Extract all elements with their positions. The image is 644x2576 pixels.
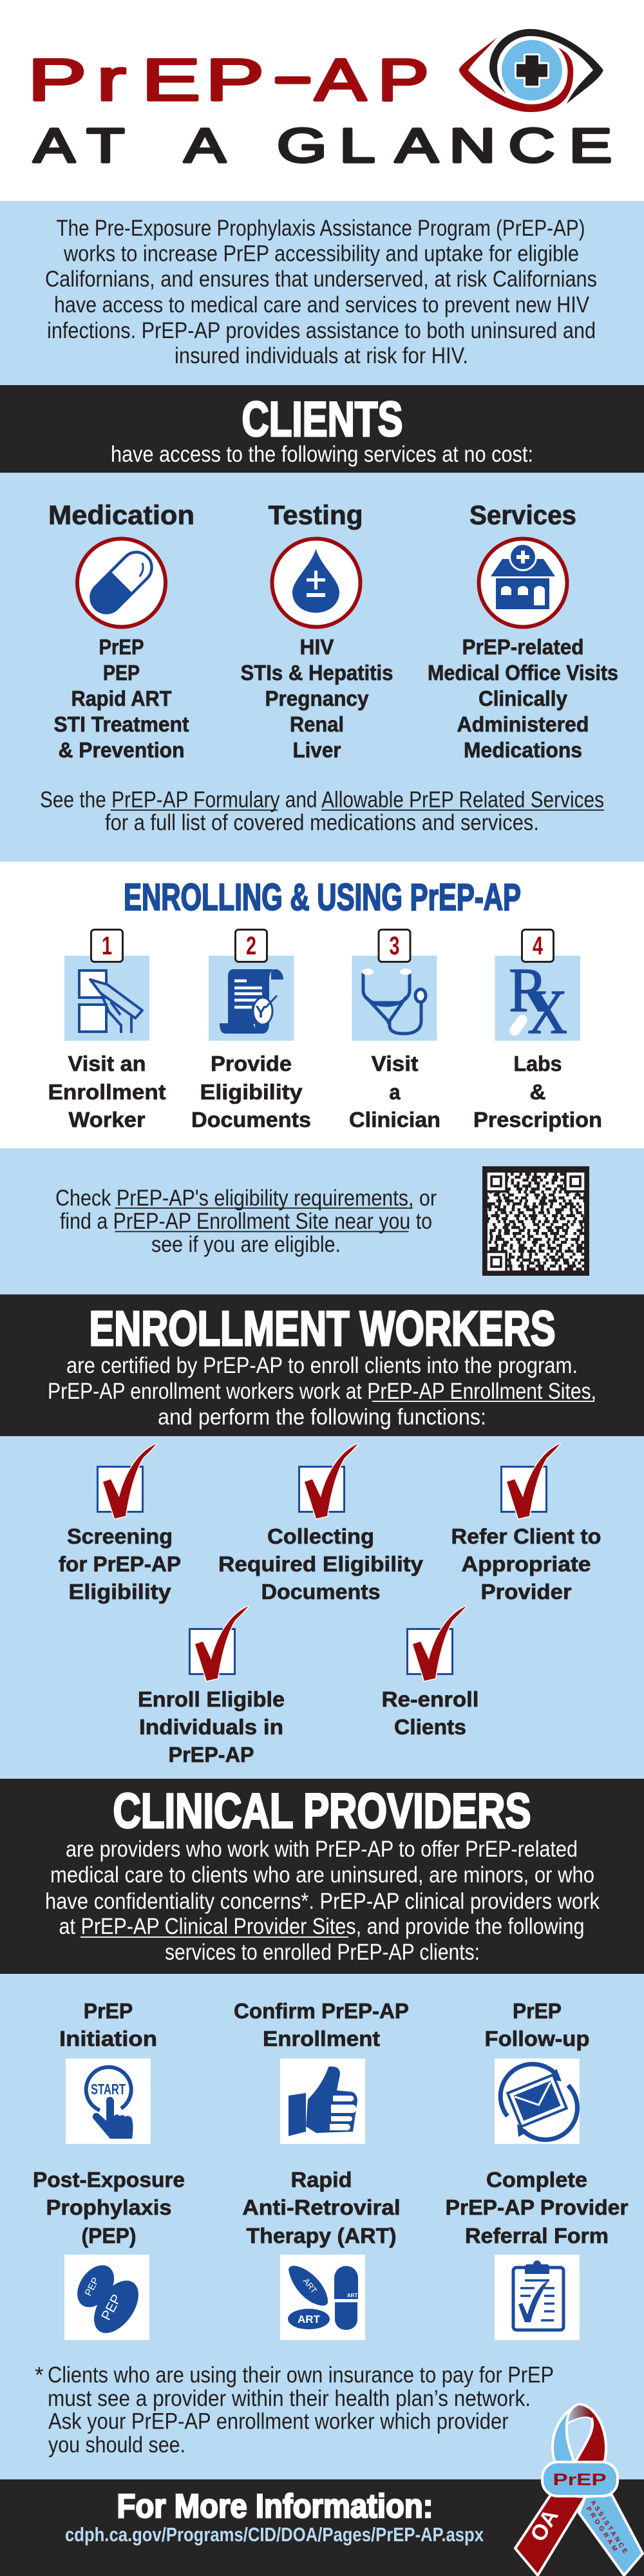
icon: checkbox (98, 1444, 156, 1519)
banner: enrollment workers (0, 1294, 644, 1436)
list: services (428, 635, 618, 762)
panel: introduction: insured individuals at risk for HIV. (175, 343, 468, 368)
function: refer client (451, 1444, 601, 1604)
footnote: you should see. (48, 2432, 185, 2458)
icon: blood drop (272, 538, 361, 627)
number badge 3: 3 (389, 932, 399, 960)
column: medication: Medication (48, 500, 194, 530)
service: PrEP initiation (59, 1999, 157, 2144)
text: eligibility links (55, 1186, 437, 1257)
step 3: clinician: Visit (371, 1052, 419, 1075)
function: enroll individuals (138, 1606, 285, 1766)
footer: more information (0, 2479, 644, 2576)
icon: awareness ribbon logo: PrEP (553, 2470, 607, 2489)
icon: eye logo (459, 29, 603, 112)
icon: Rx (507, 956, 567, 1046)
icon: clipboard (513, 2260, 564, 2330)
footnote: Ask your PrEP-AP enrollment worker which provider (48, 2409, 509, 2434)
number badge 3 (379, 930, 410, 962)
number badge 4 (522, 930, 554, 962)
service: confirm enrollment: Enrollment (263, 2027, 380, 2050)
service: rapid ART: Anti-Retroviral (242, 2195, 401, 2219)
icon: Rx: R (509, 956, 548, 1025)
service: PrEP follow-up (484, 1999, 590, 2144)
icon: awareness ribbon logo: PROGRAM (584, 2506, 618, 2553)
service: PrEP initiation: PrEP (84, 1999, 133, 2023)
list: medication: STI Treatment (54, 712, 189, 736)
text: eligibility links: see if you are eligible. (151, 1232, 341, 1257)
function: screening (59, 1444, 181, 1604)
banner body text: and perform the following functions: (158, 1405, 486, 1430)
list: testing: STIs & Hepatitis (241, 661, 393, 685)
text: eligibility links: find a PrEP-AP Enrollment Site near you to (60, 1209, 432, 1234)
icon: clinic building (479, 538, 567, 627)
list: testing: HIV (300, 635, 334, 659)
panel: enrollment worker functions (0, 1436, 644, 1779)
service: rapid ART: Therapy (ART) (246, 2224, 397, 2248)
service: referral form: Referral Form (465, 2224, 609, 2248)
list: services: Medications (464, 738, 582, 762)
heading: for more information: For More Information: (117, 2488, 433, 2525)
function: refer client: Provider (480, 1580, 572, 1604)
banner: clinical providers (0, 1779, 644, 1974)
icon: thumbs up (289, 2067, 357, 2136)
function: refer client: Refer Client to (451, 1524, 601, 1548)
service: rapid ART: Rapid (291, 2168, 352, 2192)
step 1: enrollment worker: Worker (68, 1108, 146, 1132)
function: collecting documents: Documents (261, 1580, 380, 1604)
text: eligibility links: Check PrEP-AP's eligibility requirements, or (55, 1186, 437, 1211)
function: collecting documents: Required Eligibility (218, 1552, 424, 1576)
panel: enrolling and using PrEP-AP (0, 862, 644, 1148)
icon: stethoscope (362, 969, 426, 1034)
column: services (428, 500, 618, 762)
function: enroll individuals: Individuals in (139, 1715, 283, 1739)
step 1: enrollment worker (48, 930, 166, 1132)
banner body text (48, 1353, 596, 1430)
step 1: enrollment worker: Visit an (68, 1052, 146, 1075)
icon: ART pills: ART (298, 2313, 321, 2325)
footnote: Clients who are using their own insurance to pay for PrEP (48, 2362, 554, 2388)
number badge 1 (91, 930, 122, 962)
step 2: eligibility documents (191, 930, 311, 1132)
step 4: labs and prescription: Prescription (473, 1108, 602, 1132)
function: screening: Screening (67, 1524, 173, 1548)
icon: ART pills: ART (301, 2276, 319, 2295)
QR code (482, 1166, 589, 1276)
panel: introduction: works to increase PrEP accessibility and uptake for eligible (63, 241, 579, 267)
icon: document scroll: Y (255, 1002, 267, 1021)
link: website url: cdph.ca.gov/Programs/CID/DOA/Pages/PrEP-AP.aspx (65, 2523, 484, 2546)
header: title and eye logo (0, 0, 644, 201)
list: medication: & Prevention (58, 738, 184, 762)
number badge 1: 1 (102, 932, 112, 960)
service: PrEP follow-up: PrEP (513, 1999, 562, 2023)
banner body text: services to enrolled PrEP-AP clients: (165, 1940, 480, 1965)
function: refer client: Appropriate (461, 1552, 591, 1576)
service: rapid ART (242, 2168, 401, 2340)
service: PEP: (PEP) (81, 2224, 137, 2248)
panel: client services (0, 473, 644, 862)
list: services: PrEP-related (462, 635, 583, 659)
step 2: eligibility documents: Eligibility (200, 1080, 303, 1104)
list: medication (54, 635, 189, 762)
icon: envelope cycle (500, 2064, 577, 2139)
panel: clinical provider services (0, 1974, 644, 2479)
function: collecting documents (218, 1444, 424, 1604)
column: services: Services (469, 500, 576, 530)
note: formulary links: for a full list of covered medications and services. (105, 810, 539, 835)
function: screening: Eligibility (68, 1580, 171, 1604)
function: collecting documents: Collecting (267, 1524, 374, 1548)
step 4: labs and prescription: Labs (514, 1052, 562, 1075)
icon: PEP pills: PEP (82, 2276, 102, 2298)
service: referral form (446, 2168, 629, 2340)
panel: introduction (0, 201, 644, 385)
icon: PEP pills (70, 2259, 147, 2341)
list: services: Medical Office Visits (428, 661, 618, 685)
title: AT A GLANCE: AT (33, 119, 124, 173)
note: formulary links (40, 787, 604, 835)
icon: checkbox (189, 1606, 249, 1681)
list: testing: Renal (290, 712, 344, 736)
service: PrEP initiation: Initiation (59, 2027, 157, 2050)
banner: clients (0, 385, 644, 473)
number badge 2: 2 (246, 932, 256, 960)
list: medication: PEP (103, 661, 140, 685)
icon: Rx: X (527, 978, 567, 1046)
step 4: labs and prescription: & (529, 1080, 546, 1104)
title: AT A GLANCE (33, 118, 612, 173)
icon: start button: START (91, 2081, 126, 2098)
number badge 4: 4 (533, 932, 544, 960)
banner subtext: have access to the following services at no cost: (111, 442, 533, 467)
list: medication: PrEP (99, 635, 144, 659)
list: testing: Pregnancy (265, 687, 369, 710)
banner body text: at PrEP-AP Clinical Provider Sites, and provide the following (59, 1914, 585, 1939)
icon: PEP pills: PEP (99, 2292, 124, 2323)
step 2: eligibility documents: Provide (211, 1052, 292, 1075)
list: testing: Liver (292, 738, 341, 762)
list: services: Clinically (478, 687, 568, 710)
list: medication: Rapid ART (71, 687, 171, 710)
number badge 2 (236, 930, 267, 962)
service: PrEP follow-up: Follow-up (484, 2027, 590, 2050)
service: PEP: Prophylaxis (46, 2195, 171, 2219)
icon: awareness ribbon logo (515, 2404, 643, 2575)
icon: hand signing form (79, 971, 142, 1033)
title: PrEP-AP (28, 43, 429, 113)
list: services: Administered (457, 712, 589, 736)
service: referral form: PrEP-AP Provider (446, 2195, 629, 2219)
step 3: clinician (349, 930, 440, 1132)
step 3: clinician: a (389, 1080, 401, 1104)
icon: document scroll (220, 969, 283, 1034)
icon: checkbox (407, 1606, 466, 1681)
column: testing: Testing (268, 500, 363, 530)
function: enroll individuals: PrEP-AP (169, 1743, 254, 1766)
heading: clinical providers: CLINICAL PROVIDERS (113, 1784, 531, 1839)
banner body text: are providers who work with PrEP-AP to offer PrEP-related (66, 1837, 578, 1862)
function: enroll individuals: Enroll Eligible (138, 1687, 285, 1711)
title: PrEP-AP: PrEP (28, 46, 264, 113)
panel: eligibility check (0, 1148, 644, 1294)
heading: clients: CLIENTS (242, 392, 403, 447)
service: PEP (33, 2168, 185, 2341)
column: testing (241, 500, 393, 762)
column: medication (48, 500, 194, 762)
function: re-enroll: Re-enroll (381, 1687, 479, 1711)
title: AT A GLANCE: GLANCE (277, 118, 612, 172)
icon: checkbox (299, 1444, 358, 1519)
icon: ART pills: ART (347, 2293, 357, 2298)
service: confirm enrollment (234, 1999, 409, 2144)
title: PrEP-AP: AP (315, 46, 429, 113)
step 1: enrollment worker: Enrollment (48, 1080, 166, 1104)
icon: awareness ribbon logo: OA (526, 2505, 564, 2546)
service: confirm enrollment: Confirm PrEP-AP (234, 1999, 409, 2023)
title: PrEP-AP: - (272, 43, 313, 109)
step 4: labs and prescription (473, 930, 602, 1132)
function: re-enroll (381, 1606, 479, 1739)
icon: ART pills (288, 2266, 358, 2330)
service: referral form: Complete (486, 2168, 587, 2192)
icon: start button (86, 2067, 133, 2139)
icon: checkbox (501, 1444, 560, 1519)
step 3: clinician: Clinician (349, 1108, 440, 1132)
footnote: must see a provider within their health plan’s network. (48, 2386, 531, 2411)
function: screening: for PrEP-AP (59, 1552, 181, 1576)
footnote (35, 2362, 554, 2458)
icon: awareness ribbon logo: ASSISTANCE (589, 2499, 629, 2555)
banner body text (45, 1837, 600, 1965)
banner body text: are certified by PrEP-AP to enroll clients into the program. (66, 1353, 578, 1378)
footnote: * (35, 2363, 44, 2388)
function: re-enroll: Clients (394, 1715, 466, 1739)
title: AT A GLANCE: A (184, 119, 226, 173)
icon: pill (77, 538, 166, 627)
step 2: eligibility documents: Documents (191, 1108, 311, 1132)
service: PEP: Post-Exposure (33, 2168, 185, 2192)
list: testing (241, 635, 393, 762)
